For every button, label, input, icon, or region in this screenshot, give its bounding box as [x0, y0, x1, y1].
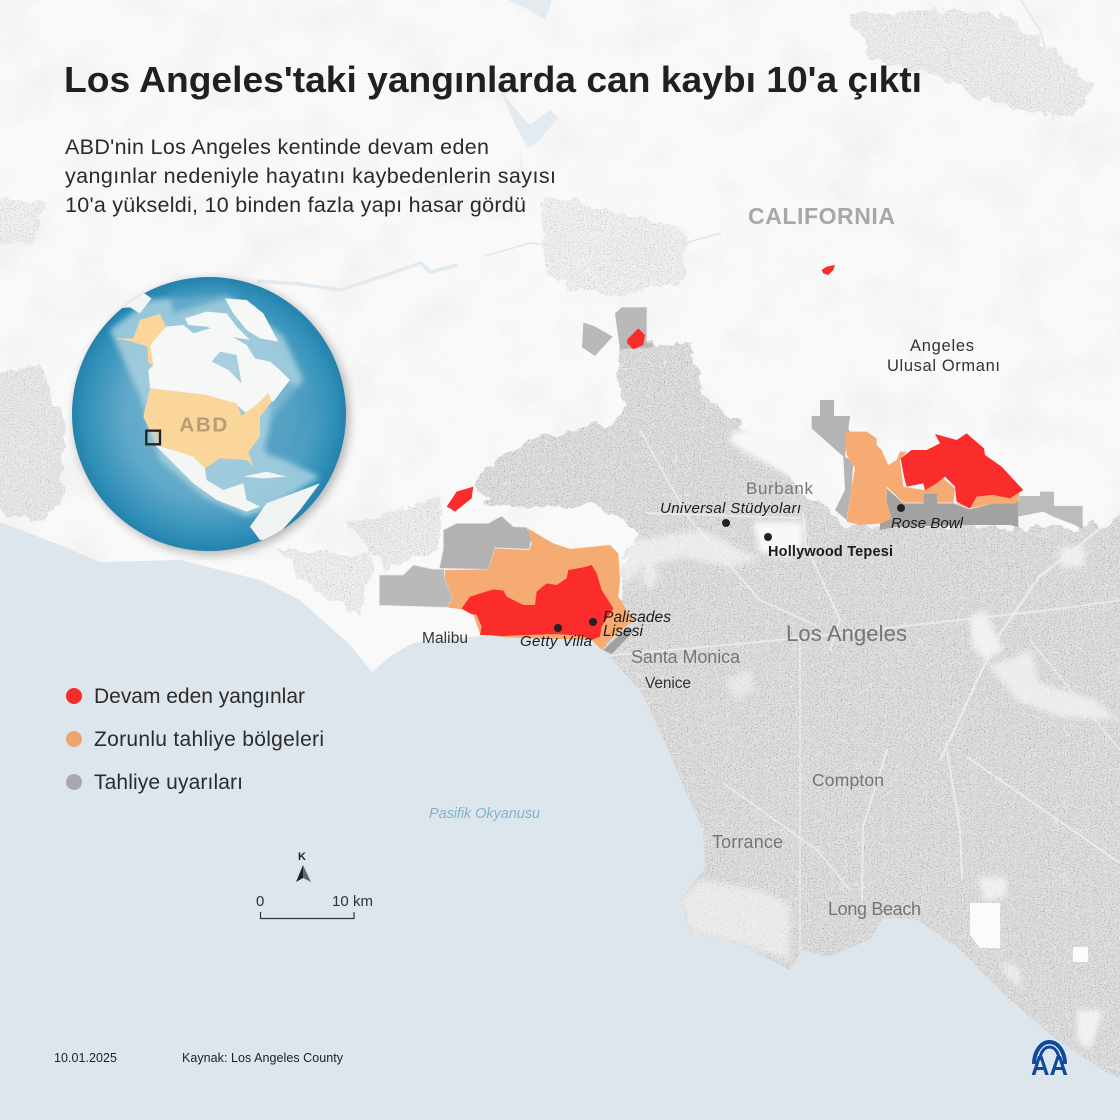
evacuation warnings: Palisades southeast: [603, 628, 635, 654]
land: Chukotka: [122, 293, 152, 314]
mandatory evacuation: Palisades: [445, 528, 634, 650]
landmark: Palisades: Palisades: [603, 609, 671, 626]
legend: active fires: Devam eden yangınlar: [94, 685, 305, 708]
evacuation warnings: Hurst west: [582, 323, 613, 356]
active fire: Kenneth: [447, 487, 473, 512]
scale bar: [256, 893, 373, 918]
title: Los Angeles'taki yangınlarda can kaybı 10'a çıktı: [64, 59, 922, 100]
landmark: Palisades: Lisesi: [603, 623, 644, 640]
evacuation warnings: Hurst: [615, 307, 653, 349]
water features: lake and rivers: [257, 0, 1053, 290]
legend: warnings: Tahliye uyarıları: [94, 771, 243, 794]
city labels: Santa Monica: [631, 647, 741, 667]
land: Arctic archipelago: [185, 312, 250, 340]
legend: [66, 685, 324, 794]
evacuation warnings: Eaton east: [1018, 492, 1083, 529]
United States: [143, 388, 272, 468]
globe shadow: [75, 280, 349, 554]
Malibu and Venice labels: Malibu: [422, 630, 468, 647]
city labels: Torrance: [712, 832, 783, 852]
globe inset: [72, 277, 349, 554]
city labels: Los Angeles: [786, 621, 907, 646]
terrain mottling: [0, 0, 1120, 560]
forest label: Ulusal Ormanı: [887, 357, 1000, 375]
ocean label: Pasifik Okyanusu: [429, 806, 540, 822]
landmark: Rose Bowl: [891, 504, 964, 532]
land: Mexico and Central America: [155, 445, 260, 512]
source: Kaynak: Los Angeles County: [182, 1051, 344, 1065]
subtitle: ABD'nin Los Angeles kentinde devam eden: [65, 135, 489, 159]
subtitle: 10'a yükseldi, 10 binden fazla yapı hasar gördü: [65, 193, 526, 217]
freeways: [560, 430, 1120, 1000]
Hudson Bay: [212, 352, 242, 383]
map labels: [422, 203, 1000, 919]
logo: AA: AA: [1031, 1050, 1068, 1081]
land: Greenland: [225, 298, 278, 342]
hills and open space: [617, 427, 1117, 1050]
city labels: Long Beach: [828, 899, 921, 919]
ocean: [0, 522, 1120, 1120]
evacuation warnings: Palisades north: [439, 516, 532, 569]
landmark: Universal: [660, 500, 801, 527]
city labels: Compton: [812, 770, 884, 790]
date: 10.01.2025: [54, 1051, 117, 1065]
arctic ocean bands: [169, 286, 233, 315]
Malibu and Venice labels: Venice: [645, 675, 691, 692]
landmark: Hollywood: Hollywood Tepesi: [768, 544, 893, 560]
landmark: Getty: Getty Villa: [520, 633, 592, 650]
legend: mandatory evacuation: Zorunlu tahliye bölgeleri: [94, 728, 324, 751]
landmark: Palisades: [589, 609, 671, 640]
Alaska: [115, 314, 166, 365]
Malibu and Venice labels: [422, 630, 691, 692]
region label: CALIFORNIA: [748, 203, 895, 229]
locator box: [146, 431, 160, 444]
forest label: Angeles: [910, 337, 974, 355]
shelf shading: [110, 293, 320, 517]
globe sphere: [72, 277, 346, 551]
Palisades fire zones: [379, 487, 635, 654]
land: Canada: [148, 325, 290, 413]
mandatory evacuation: Eaton: [845, 428, 1020, 525]
scale bar: 0: [256, 893, 264, 910]
active fire: north: [822, 265, 835, 275]
city labels: [631, 479, 921, 919]
scale bar: 10 km: [332, 893, 373, 910]
city labels: Burbank: [746, 479, 814, 498]
evacuation warnings: Eaton south: [880, 488, 1018, 530]
evacuation warnings: Eaton northwest: [812, 400, 853, 520]
active fire: Palisades: [462, 565, 613, 640]
active fire: Hurst: [627, 328, 645, 349]
land: Cuba and Caribbean: [243, 472, 287, 478]
active fire: Eaton: [901, 433, 1023, 508]
north arrow: [296, 851, 311, 882]
land: South America: [250, 483, 320, 540]
landmark: Getty: [520, 624, 592, 650]
Eaton fire zones: [812, 400, 1083, 530]
subtitle: yangınlar nedeniyle hayatını kaybedenlerin sayısı: [65, 164, 556, 188]
forest label: [887, 337, 1000, 375]
landmark: Universal: Universal Stüdyoları: [660, 500, 801, 517]
ABD label: ABD: [179, 413, 227, 436]
north arrow: K: [298, 851, 306, 863]
Hurst fire zones: [582, 265, 835, 356]
subtitle: [65, 135, 556, 217]
landmark: Rose Bowl: Rose Bowl: [891, 515, 964, 532]
landmark: Hollywood: [764, 533, 893, 560]
evacuation warnings: Palisades west: [379, 565, 453, 607]
